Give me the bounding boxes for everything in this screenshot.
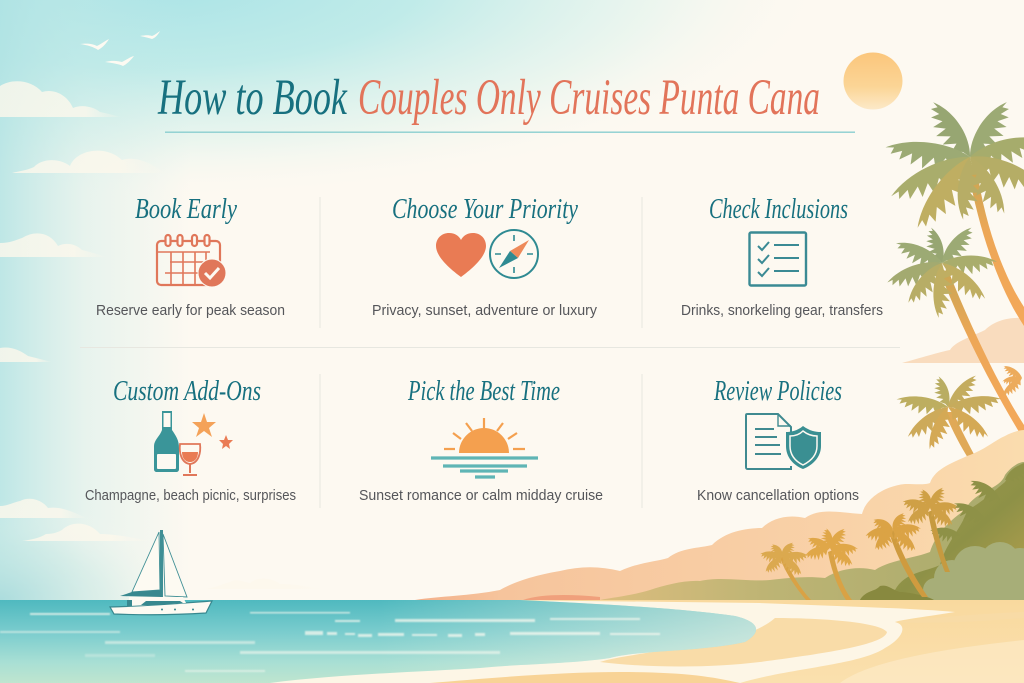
description: Champagne, beach picnic, surprises [85,488,296,504]
icon: document [746,414,791,469]
coral shoreline hill [523,595,600,600]
title: how to book: How to Book [157,70,348,126]
panel: pick the best time [359,375,603,504]
beach sand [0,600,1024,683]
icon: large star [192,413,216,437]
heading: Review Policies [713,375,842,407]
icon: small star [219,435,233,449]
boom cover [120,590,162,597]
heading: Custom Add-Ons [113,375,261,407]
sage shrubs [923,542,1024,602]
panel: choose your priority [372,193,598,319]
sea [0,600,756,683]
small palms on shore [759,485,959,600]
icon: shield [786,426,821,469]
panel: review policies [697,375,859,504]
heading: Check Inclusions [709,193,848,225]
title underline [165,132,855,133]
icon: heart [436,233,486,277]
description: Sunset romance or calm midday cruise [359,488,603,504]
icon: champagne bottle [154,411,179,472]
description: Know cancellation options [697,488,859,504]
mast [160,530,163,605]
background hills [415,430,1024,600]
shore palm 2 [804,526,858,600]
wave highlights [0,612,660,672]
sailboat [110,530,212,615]
shore palm 3 [865,511,928,597]
icon: wine glass [180,444,200,475]
clouds [0,81,322,589]
heading: Book Early [135,193,237,225]
shore palm 1 [759,540,811,600]
sun [844,52,902,110]
palm: medium [885,223,1024,440]
cabin [129,597,186,606]
heading: Choose Your Priority [392,193,578,225]
description: Privacy, sunset, adventure or luxury [372,303,598,319]
far hills behind palms [902,318,1024,363]
grid dividers [80,197,900,508]
description: Drinks, snorkeling gear, transfers [681,303,883,319]
foam strip [260,600,955,683]
sails [132,532,160,592]
shore palm 4 [900,485,959,572]
palm: large [883,97,1024,326]
hull [110,601,212,615]
birds [80,31,160,66]
palm: far right partial [1000,363,1024,400]
panel: custom add-ons [85,375,296,504]
description: Reserve early for peak season [96,303,285,319]
jungle foliage [929,459,1024,544]
icon: compass [490,230,538,278]
heading: Pick the Best Time [407,375,560,407]
title [157,70,820,126]
jungle bushes [600,459,1024,602]
icon: calendar with check [157,235,226,287]
panel: book early [96,193,285,319]
palm: small right [895,372,1003,497]
wet sand patch [600,618,887,666]
dark shrub [860,586,934,600]
panel: check inclusions [681,193,883,319]
icon: sunset over water [431,418,538,477]
icon: checklist [750,232,806,286]
